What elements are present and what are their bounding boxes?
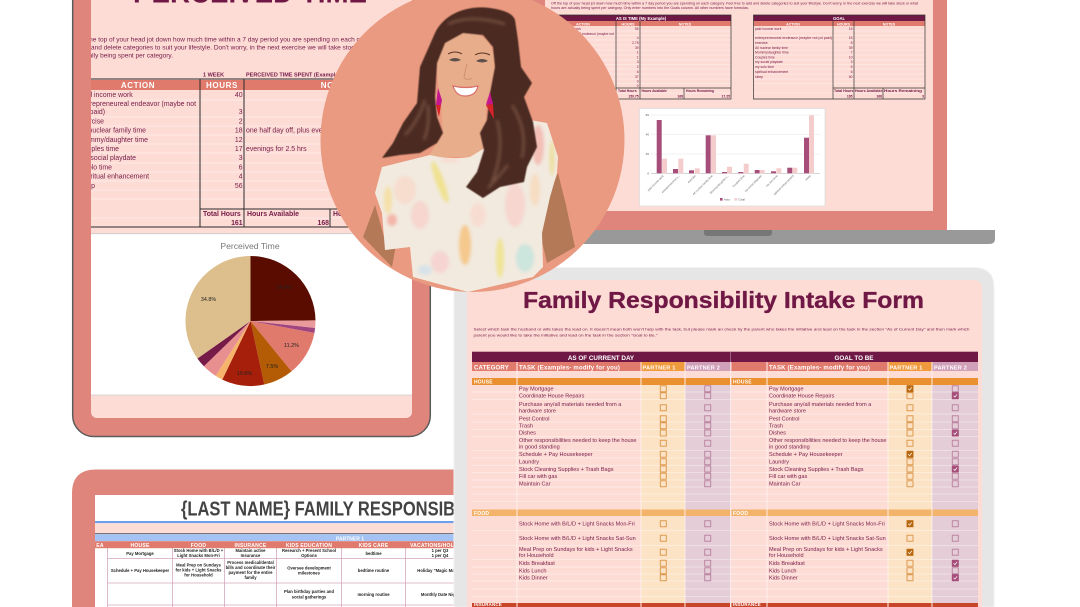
nose shadow	[464, 64, 472, 80]
table: perceived time: 17	[235, 146, 243, 153]
table: perceived time: Couples time	[79, 146, 119, 153]
section: insurance: INSURANCE	[474, 602, 502, 607]
tasks: goal to be: Stock Home with B/L/D + Light Snacks Mon-Fri	[769, 522, 885, 528]
tasks: current day: Stock Home with B/L/D + Light Snacks Mon-Fri	[519, 522, 635, 528]
checked boxes: partner 1	[907, 386, 913, 555]
pie chart: perceived time	[185, 241, 316, 386]
table: perceived time: 168	[318, 220, 329, 227]
laptop screen bezel	[530, 0, 947, 230]
table: as is time: 0	[637, 84, 639, 88]
cell text: Light Snacks Mon-Fri	[177, 553, 220, 558]
table: as is time: 1	[637, 56, 639, 60]
cell text: social gatherings	[292, 594, 327, 600]
panel: family responsibilities card	[72, 470, 454, 607]
cell text: for Household	[184, 572, 213, 578]
table: intake form: GOAL TO BE	[835, 355, 873, 362]
section: house: HOUSE	[474, 380, 493, 386]
table: goal: Couples time	[755, 56, 775, 60]
table: perceived time	[91, 72, 348, 228]
hair	[382, 7, 537, 198]
chart area	[91, 234, 412, 395]
cell text: Research + Present School	[282, 548, 336, 553]
table: goal: Mommy/daughter time	[755, 50, 789, 54]
tasks: goal to be: Laundry	[769, 460, 789, 466]
column headers: HOUSE	[130, 543, 150, 549]
instructions: hours are actually being spent per category.	[47, 52, 173, 60]
table: perceived time: 2	[239, 119, 243, 126]
pie chart: perceived time: 7.5%	[266, 364, 278, 370]
table: goal: 10	[849, 56, 853, 60]
table: goal: entrepreneureal endeavor (maybe not pd paid)	[755, 36, 832, 40]
section: insurance: INSURANCE	[733, 602, 761, 607]
tasks: current day: Stock Cleaning Supplies + Trash Bags	[519, 467, 614, 473]
bar chart: acts vs goal: my social playdate	[744, 174, 763, 193]
tasks: goal to be: in good standing	[769, 445, 810, 451]
cell text: payment for the entire	[229, 570, 273, 575]
form sheet	[467, 280, 982, 607]
tasks: current day: Schedule + Pay Housekeeper	[519, 452, 593, 458]
instructions	[91, 37, 360, 59]
arms	[363, 173, 575, 267]
bar chart: acts vs goal: 0	[647, 171, 649, 175]
tasks: goal to be: Pest Control	[769, 417, 800, 423]
tasks: current day: Maintain Car	[519, 482, 551, 488]
table: intake form: TASK (Examples- modify for you)	[769, 365, 870, 371]
table: as is time: 3	[637, 60, 639, 64]
tasks: current day: Pay Mortgage	[519, 387, 554, 393]
tasks: current day: Other responsibilities needed to keep the house	[519, 438, 636, 444]
table: goal: exercise	[755, 41, 768, 45]
woman portrait	[363, 7, 575, 292]
table: as is time: 55	[635, 27, 639, 31]
instructions: and delete categories to suit your lifestyle. Don't worry, in the next exercise we will take stock of what	[91, 44, 381, 52]
bar chart: acts vs goal: Goal	[738, 198, 745, 202]
pie chart: perceived time: 11.2%	[284, 343, 299, 349]
tasks: current day: Coordinate House Repairs	[519, 394, 585, 400]
tasks: goal to be: Fill car with gas	[769, 474, 807, 480]
table: perceived time: Total Hours	[203, 211, 241, 218]
table: goal: Total Hours	[834, 89, 854, 93]
table: perceived time: 6	[239, 165, 243, 172]
tablet screen	[91, 0, 412, 418]
table: as is time: 37	[635, 75, 639, 79]
table: goal: All nuclear family time	[755, 46, 788, 50]
bar chart: acts vs goal: 20	[646, 152, 649, 156]
cell text: Pay Mortgage	[126, 551, 154, 556]
bar chart: acts vs goal: my solo time	[765, 174, 779, 188]
tasks: goal to be: Meal Prep on Sundays for kids + Light Snacks	[769, 547, 883, 553]
tasks: current day: Purchase any/all materials needed from a	[519, 402, 622, 408]
cell text: morning routine	[357, 592, 390, 597]
bar chart: acts vs goal: exercise	[687, 174, 697, 184]
tasks: goal to be: Trash	[769, 424, 783, 430]
bar chart: acts vs goal: 60	[646, 113, 649, 117]
table: perceived time: Hours Available	[247, 211, 299, 218]
tasks: current day: Meal Prep on Sundays for kids + Light Snacks	[519, 547, 633, 553]
earring left	[436, 88, 442, 117]
tablet frame	[73, 0, 430, 436]
table: as is time: AS IS TIME (My Example)	[616, 16, 667, 21]
table: as is time: Hours Available	[642, 89, 667, 93]
table: as is time: 39	[635, 46, 639, 50]
table: as is time: paid income work	[555, 27, 581, 31]
table: goal: 39	[849, 46, 853, 50]
tasks: current day: Kids Breakfast	[519, 561, 555, 567]
tasks: current day: Trash	[519, 424, 533, 430]
table: as is time: 168	[677, 95, 683, 99]
table: goal: 5	[851, 65, 853, 69]
eyes	[448, 52, 490, 62]
table: goal: NOTES	[883, 22, 896, 26]
column headers: KIDS CARE	[359, 543, 389, 549]
table: goal: 165	[847, 95, 853, 99]
table: goal: 168	[876, 95, 882, 99]
table: goal: paid income work	[755, 27, 782, 31]
form instructions: parent you would like to take the initiative and lead on the task in the section "Goal to Be."	[474, 332, 658, 337]
cell text: milestones	[298, 570, 321, 576]
section: house: HOUSE	[733, 380, 752, 386]
shirt	[375, 120, 558, 292]
bar chart: acts vs goal: paid income work	[646, 173, 665, 192]
tasks: current day: for Household	[519, 553, 554, 559]
tasks: current day: Dishes	[519, 431, 536, 437]
cell text: Plan birthday parties and	[284, 589, 334, 594]
table: as is time: ACTION	[576, 22, 590, 26]
table: perceived time: 3	[239, 109, 243, 116]
table: intake form: AS OF CURRENT DAY	[568, 355, 635, 362]
table: goal: 15	[849, 27, 853, 31]
bar chart: acts vs goal: spiritual enhancement	[773, 174, 795, 196]
table: intake form: PARTNER 2	[934, 365, 967, 371]
card frame	[72, 470, 470, 607]
table: perceived time: paid income work	[79, 92, 133, 99]
table: as is time: 17.25	[722, 95, 730, 99]
cell text: Maintain active	[235, 548, 266, 553]
row separators	[472, 392, 978, 596]
table: perceived time: 4	[239, 174, 243, 181]
cell text: bills and coordinate their	[226, 565, 276, 570]
table: as is time: 1	[637, 50, 639, 54]
section: insurance	[472, 602, 978, 607]
laptop instructions: Off the top of your head jot down how much time within a 7 day period you are spending on each category. Feel free to add and delete categories to suit your lifestyle. Don't worry, in the next exercise we will take stock or what	[551, 2, 918, 6]
table: perceived time: 18	[235, 128, 243, 135]
checkboxes: partner 2	[705, 386, 958, 581]
table: perceived time: exercise	[78, 119, 104, 126]
table: perceived time: my solo time	[73, 165, 112, 172]
tasks: goal to be: Kids Dinner	[769, 576, 798, 582]
pie chart: perceived time: 10.6%	[237, 371, 252, 377]
table: perceived time: All nuclear family time	[79, 128, 146, 135]
column headers: VACATIONS/HOLIDAYS	[410, 543, 470, 549]
table: goal: 60	[849, 75, 853, 79]
table: perceived time: my social playdate	[79, 155, 136, 162]
column headers: KIDS EDUCATION	[286, 543, 332, 549]
table: perceived time: spiritual enhancement	[82, 174, 149, 181]
table: goal: my social playdate	[755, 60, 783, 64]
table: as is time: 0	[637, 80, 639, 84]
tasks: goal to be: Purchase any/all materials needed from a	[769, 402, 872, 408]
table: perceived time: 40	[235, 92, 243, 99]
laptop instructions	[551, 2, 918, 10]
column headers: EA	[96, 543, 104, 549]
table: perceived time: NOTES	[321, 81, 351, 90]
table: goal: sleep	[755, 75, 763, 79]
tasks: current day: Kids Lunch	[519, 569, 546, 575]
table: perceived time: 161	[231, 220, 243, 227]
cell text: Meal Prep on Sundays	[176, 562, 222, 568]
table: goal: my solo time	[755, 65, 774, 69]
table: goal: 3	[851, 60, 853, 64]
cell text: 1 per Q3	[432, 548, 449, 553]
card sheet: PARTNER 1	[336, 536, 364, 542]
cell text: Oversee development	[287, 566, 331, 570]
partner column fills	[641, 385, 932, 607]
tasks: goal to be: Stock Cleaning Supplies + Trash Bags	[769, 467, 864, 473]
table: as is time: entrepreneureal endeavor (maybe not	[557, 32, 614, 36]
cell text: Stock Home with B/L/D +	[174, 548, 224, 553]
table: goal: 6	[851, 70, 853, 74]
checked boxes: partner 2	[952, 393, 958, 581]
cell text: Insurance	[241, 553, 261, 558]
table: goal: Hours Remaining	[884, 89, 922, 93]
form instructions: Select which task the husband or wife takes the lead on. It doesn't mean both won't help with the task, but please mark an check by the parent who takes the initiative and lead on the task in the section "As of Current Day" and then mark which	[474, 326, 970, 332]
table: as is time: 150.75	[628, 95, 639, 99]
cell text: Process medical/dental	[227, 560, 274, 565]
tasks: current day	[519, 387, 636, 582]
table: perceived time: 7	[406, 220, 410, 227]
tasks: goal to be: for Household	[769, 553, 804, 559]
table: intake form: PARTNER 2	[687, 365, 720, 371]
hair highlights	[405, 19, 524, 188]
table: intake form	[472, 352, 978, 607]
tasks: goal to be: Maintain Car	[769, 482, 801, 488]
table: as is time: NOTES	[679, 22, 692, 26]
table: perceived time: evenings for 2.5 hrs	[246, 146, 307, 153]
form instructions	[474, 326, 970, 337]
column headers: FOOD	[191, 543, 206, 549]
tasks: goal to be: hardware store	[769, 409, 806, 415]
card sheet	[95, 495, 454, 607]
bar chart: acts vs goal: sleep	[804, 174, 812, 181]
table: as is time: 6	[637, 70, 639, 74]
cell text: 1 per Q4	[432, 553, 449, 558]
table: as is time	[551, 15, 731, 99]
laptop notch	[704, 230, 772, 236]
table: as is time: 2	[637, 65, 639, 69]
column headers: INSURANCE	[234, 543, 267, 549]
table: perceived time: sleep	[79, 183, 95, 190]
bar chart: acts vs goal: Acts	[724, 198, 730, 202]
table: perceived time: paid)	[90, 109, 105, 116]
cell text: Holiday "Magic Maker"	[417, 568, 463, 573]
tasks: current day: Stock Home with B/L/D + Light Snacks Sat-Sun	[519, 536, 636, 542]
table: intake form: CATEGORY	[474, 365, 509, 371]
tasks: goal to be: Coordinate House Repairs	[769, 394, 835, 400]
bar chart: acts vs goal: All nuclear family time	[692, 174, 714, 196]
table: intake form: PARTNER 1	[890, 365, 923, 371]
smile	[453, 86, 478, 96]
laptop instructions: hours are actually being spent per category. Only enter numbers into the Goals column. All other numbers have formulas.	[551, 6, 749, 10]
circle background	[320, 0, 624, 292]
table: as is time: Total Hours	[618, 89, 637, 93]
table: perceived time: Mommy/daughter time	[79, 137, 148, 144]
table: perceived time: PERCEIVED TIME SPENT (Example)	[246, 72, 340, 78]
face, neck and chest skin	[428, 32, 495, 157]
table: intake form: TASK (Examples- modify for you)	[519, 365, 620, 371]
section: house	[472, 378, 978, 386]
table: perceived time: ACTION	[121, 81, 155, 90]
panel: family responsibility intake form	[454, 268, 994, 607]
laptop base	[540, 230, 995, 244]
table: perceived time: 1 WEEK	[203, 72, 224, 78]
panel: laptop with time tracking sheet	[530, 0, 995, 244]
bar chart: acts vs goal: 40	[646, 132, 649, 136]
panel: left tablet perceived time	[47, 0, 430, 436]
cell text: family	[244, 575, 257, 580]
bar chart: acts vs goal: Couples time	[731, 174, 746, 188]
table: intake form: PARTNER 1	[642, 365, 676, 371]
bar chart: acts vs goal: Mommy/daughter t...	[709, 174, 730, 195]
table: goal: spiritual enhancement	[755, 70, 788, 74]
bar chart: acts vs goal: entrepreneureal e...	[661, 174, 681, 194]
table: as is time: Hours Remaining	[686, 89, 714, 93]
checkboxes: partner 1	[660, 386, 913, 581]
tasks: current day: hardware store	[519, 409, 556, 415]
table: goal: 5	[851, 41, 853, 45]
heading: family responsibilities: {LAST NAME} FAMILY RESPONSIBILITIES	[181, 498, 511, 520]
pie chart: perceived time: Perceived Time	[220, 241, 280, 251]
table: perceived time: Hours Remaining	[333, 211, 390, 218]
tasks: goal to be: Other responsibilities needed to keep the house	[769, 438, 886, 444]
tasks: goal to be: Kids Breakfast	[769, 561, 805, 567]
table: goal: GOAL	[833, 16, 845, 21]
cell text: Monthly Date Night	[421, 592, 460, 597]
pie chart: perceived time: 34.8%	[201, 297, 216, 303]
table: goal: 15	[849, 36, 853, 40]
pie chart: perceived time: 24.8%	[276, 285, 292, 291]
table: as is time: 2.75	[632, 41, 639, 45]
table: goal	[754, 15, 925, 99]
column headers	[96, 543, 454, 547]
laptop screen	[545, 0, 933, 211]
tasks: current day: Kids Dinner	[519, 576, 548, 582]
cell text	[111, 548, 463, 600]
earring right	[486, 92, 494, 119]
portrait circle	[320, 0, 624, 292]
table: perceived time: HOURS	[206, 81, 238, 90]
instructions: Off the top of your head jot down how much time within a 7 day period you are spending on each category.	[77, 36, 383, 44]
table: as is time: HOURS	[622, 22, 635, 26]
tasks: current day: Fill car with gas	[519, 474, 557, 480]
heading: form title: Family Responsibility Intake Form	[523, 287, 924, 313]
tasks: goal to be: Dishes	[769, 431, 786, 437]
table: perceived time: 3	[239, 155, 243, 162]
cell text: bedtime routine	[358, 568, 390, 573]
tasks: goal to be: Kids Lunch	[769, 569, 796, 575]
cell text: for kids + Light Snacks	[176, 568, 222, 572]
table: perceived time: 56	[235, 183, 243, 190]
tasks: goal to be	[769, 387, 886, 582]
tasks: current day: Laundry	[519, 460, 539, 466]
table: perceived time: 12	[235, 137, 243, 144]
table: as is time: 4	[637, 36, 639, 40]
table: perceived time: entrepreneureal endeavor (maybe not	[80, 101, 196, 108]
table: goal: 7	[851, 50, 853, 54]
section: food: FOOD	[474, 511, 489, 517]
section: food: FOOD	[733, 511, 748, 517]
tasks: goal to be: Stock Home with B/L/D + Light Snacks Sat-Sun	[769, 536, 886, 542]
tasks: goal to be: Schedule + Pay Housekeeper	[769, 452, 843, 458]
form frame	[454, 268, 994, 607]
tasks: current day: in good standing	[519, 445, 560, 451]
tasks: current day: Pest Control	[519, 417, 550, 423]
cell text: Options	[301, 553, 318, 558]
tasks: goal to be: Pay Mortgage	[769, 387, 804, 393]
header rows	[472, 352, 978, 362]
table: goal: ACTION	[786, 22, 800, 26]
cell text: Schedule + Pay Housekeeper	[111, 568, 170, 573]
table: goal: Hours Available	[855, 89, 883, 93]
table: perceived time: one half day off, plus evenings	[246, 128, 340, 135]
table: goal: HOURS	[837, 22, 851, 26]
bar chart: acts vs goal	[640, 108, 825, 206]
section: food	[472, 510, 978, 517]
cell text: bedtime	[365, 551, 382, 556]
table: goal: 3	[922, 95, 924, 99]
